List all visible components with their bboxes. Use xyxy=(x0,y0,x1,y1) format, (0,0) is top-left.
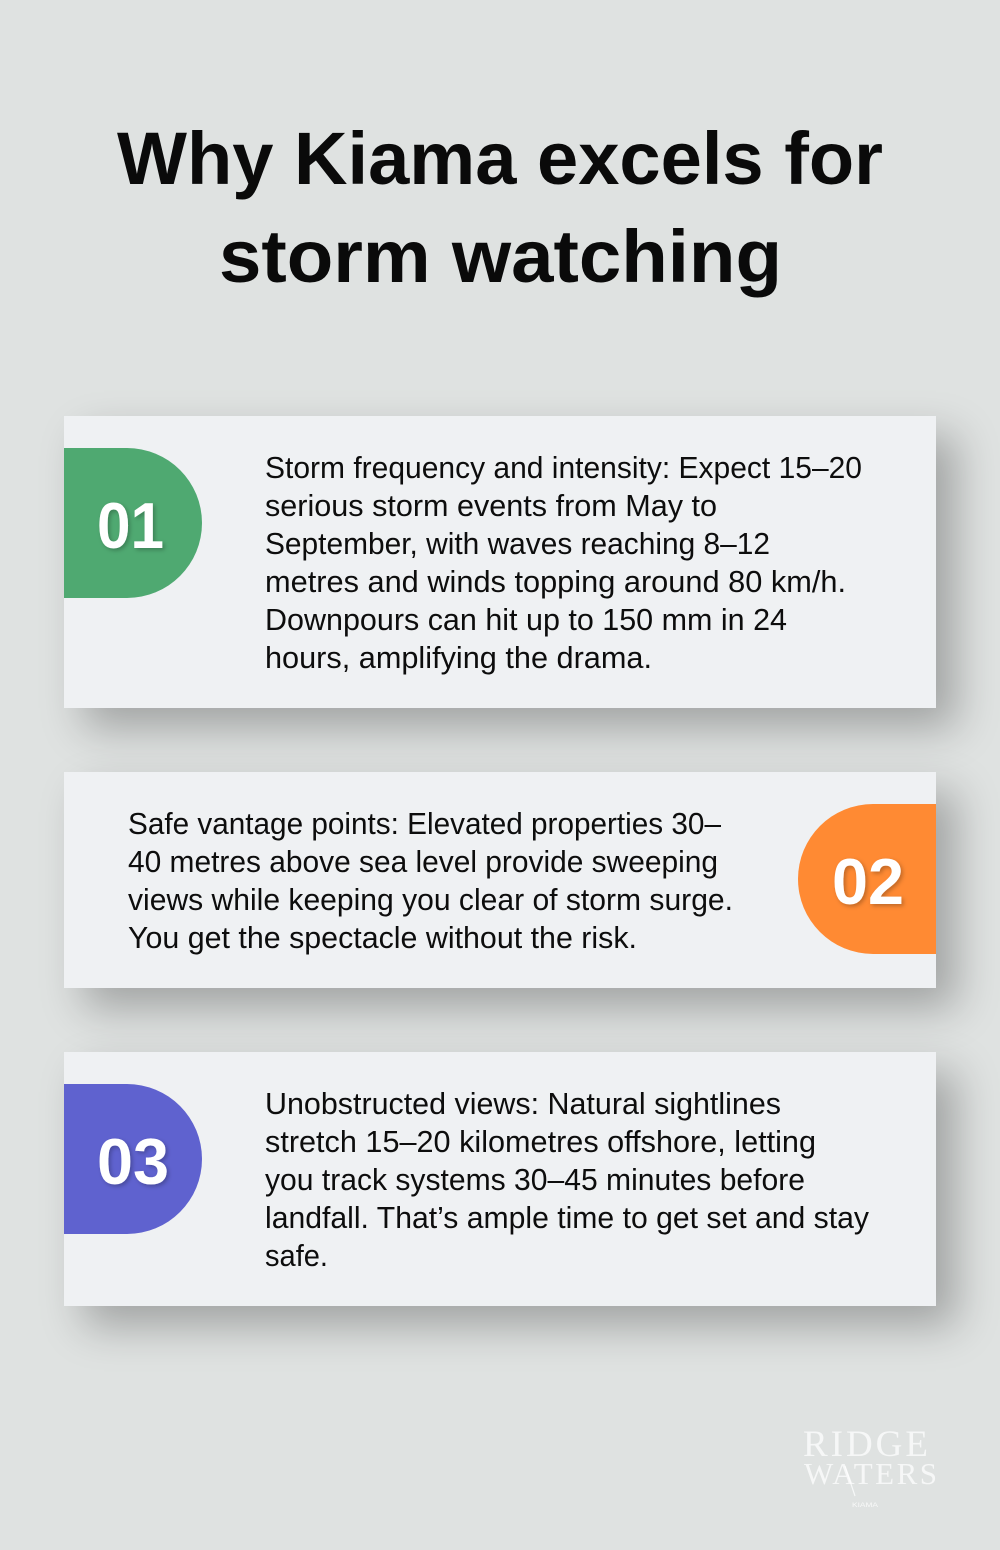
logo: Ridge Waters Kiama: KIAMA xyxy=(852,1502,879,1509)
badge: 02 xyxy=(798,804,936,954)
panel: safe vantage points xyxy=(64,772,936,988)
text: storm frequency description xyxy=(265,451,862,675)
text: storm frequency description: Downpours can hit up to 150 mm in 24 xyxy=(265,603,787,637)
text: storm frequency description: hours, amplifying the drama. xyxy=(265,641,652,675)
text: safe vantage points description: views while keeping you clear of storm surge. xyxy=(128,883,733,917)
logo: Ridge Waters Kiama xyxy=(803,1424,937,1509)
text: storm frequency description: serious storm events from May to xyxy=(265,489,717,523)
badge: 01: 01 xyxy=(97,489,164,562)
text: unobstructed views description: Unobstructed views: Natural sightlines xyxy=(265,1087,781,1121)
panel: unobstructed views xyxy=(64,1052,936,1306)
text: safe vantage points description: 40 metres above sea level provide sweeping xyxy=(128,845,718,879)
logo: Ridge Waters Kiama: RIDGE xyxy=(803,1424,928,1465)
text: unobstructed views description: you track systems 30–45 minutes before xyxy=(265,1163,805,1197)
title xyxy=(117,117,883,298)
text: storm frequency description: September, with waves reaching 8–12 xyxy=(265,527,770,561)
text: unobstructed views description: stretch 15–20 kilometres offshore, letting xyxy=(265,1125,816,1159)
text: unobstructed views description: landfall. That’s ample time to get set and stay xyxy=(265,1201,870,1235)
badge: 03 xyxy=(64,1084,202,1234)
text: safe vantage points description: You get the spectacle without the risk. xyxy=(128,921,637,955)
title: storm watching xyxy=(219,215,782,298)
text: storm frequency description: Storm frequency and intensity: Expect 15–20 xyxy=(265,451,862,485)
badge: 02: 02 xyxy=(832,845,904,918)
panel: storm frequency and intensity xyxy=(64,416,936,708)
title: Why Kiama excels for xyxy=(117,117,883,200)
badge: 03: 03 xyxy=(97,1125,169,1198)
logo: Ridge Waters Kiama: WATERS xyxy=(804,1456,937,1491)
text: safe vantage points description xyxy=(128,807,733,955)
text: safe vantage points description: Safe vantage points: Elevated properties 30– xyxy=(128,807,721,841)
text: storm frequency description: metres and winds topping around 80 km/h. xyxy=(265,565,846,599)
text: unobstructed views description: safe. xyxy=(265,1239,328,1273)
badge: 01 xyxy=(64,448,202,598)
text: unobstructed views description xyxy=(265,1087,870,1273)
